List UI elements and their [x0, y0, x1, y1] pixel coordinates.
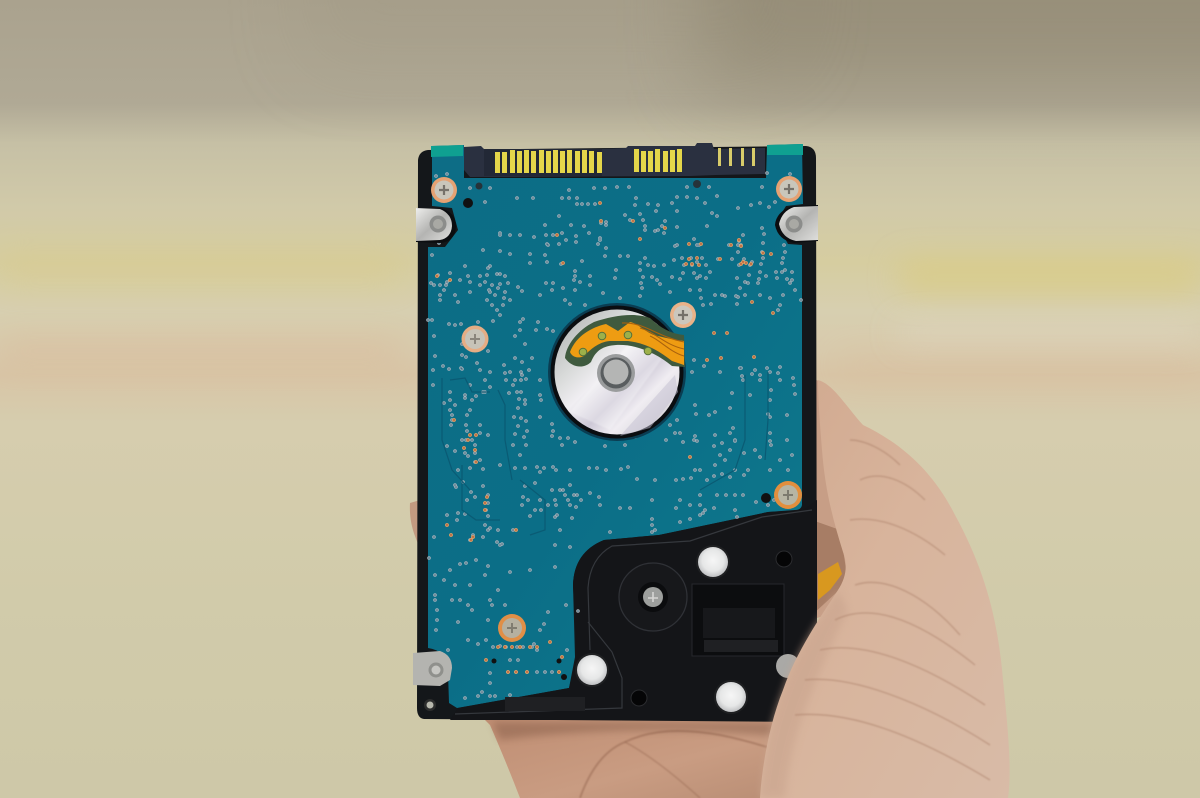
recessed label on lower plate [692, 584, 784, 656]
black lower cover plate [450, 500, 817, 720]
hand: thumb and wrist in front of the drive [760, 380, 1010, 798]
via dots on circuit board [428, 173, 801, 698]
orange ringed screws [431, 176, 802, 642]
spindle window and platter [548, 303, 686, 441]
flex vias [579, 331, 652, 356]
silver corner brackets with screws [413, 205, 818, 711]
gold flex cable behind the hand [818, 562, 842, 600]
skin creases on hand [795, 440, 990, 780]
lower-plate motor circle and screw [619, 563, 687, 631]
white plastic pads [575, 545, 800, 714]
flex circuit [565, 315, 685, 367]
drive chassis [417, 146, 817, 722]
hand: palm and fingers behind the drive [410, 378, 880, 798]
circuit traces [442, 372, 768, 535]
teal connector tabs [431, 144, 803, 157]
flex contact strips [622, 323, 684, 356]
small holes on lower plate [631, 551, 792, 706]
cover plate outline highlights [455, 510, 812, 714]
SATA connector [464, 143, 765, 177]
thin power pins [718, 148, 755, 166]
mounting holes on board [463, 180, 771, 680]
platter disk [554, 310, 680, 434]
spindle hub [597, 354, 635, 392]
hard drive body [413, 143, 818, 722]
circuit board [428, 144, 803, 708]
gold data pins [495, 149, 682, 173]
ribbed detail at lower edge [505, 697, 585, 711]
